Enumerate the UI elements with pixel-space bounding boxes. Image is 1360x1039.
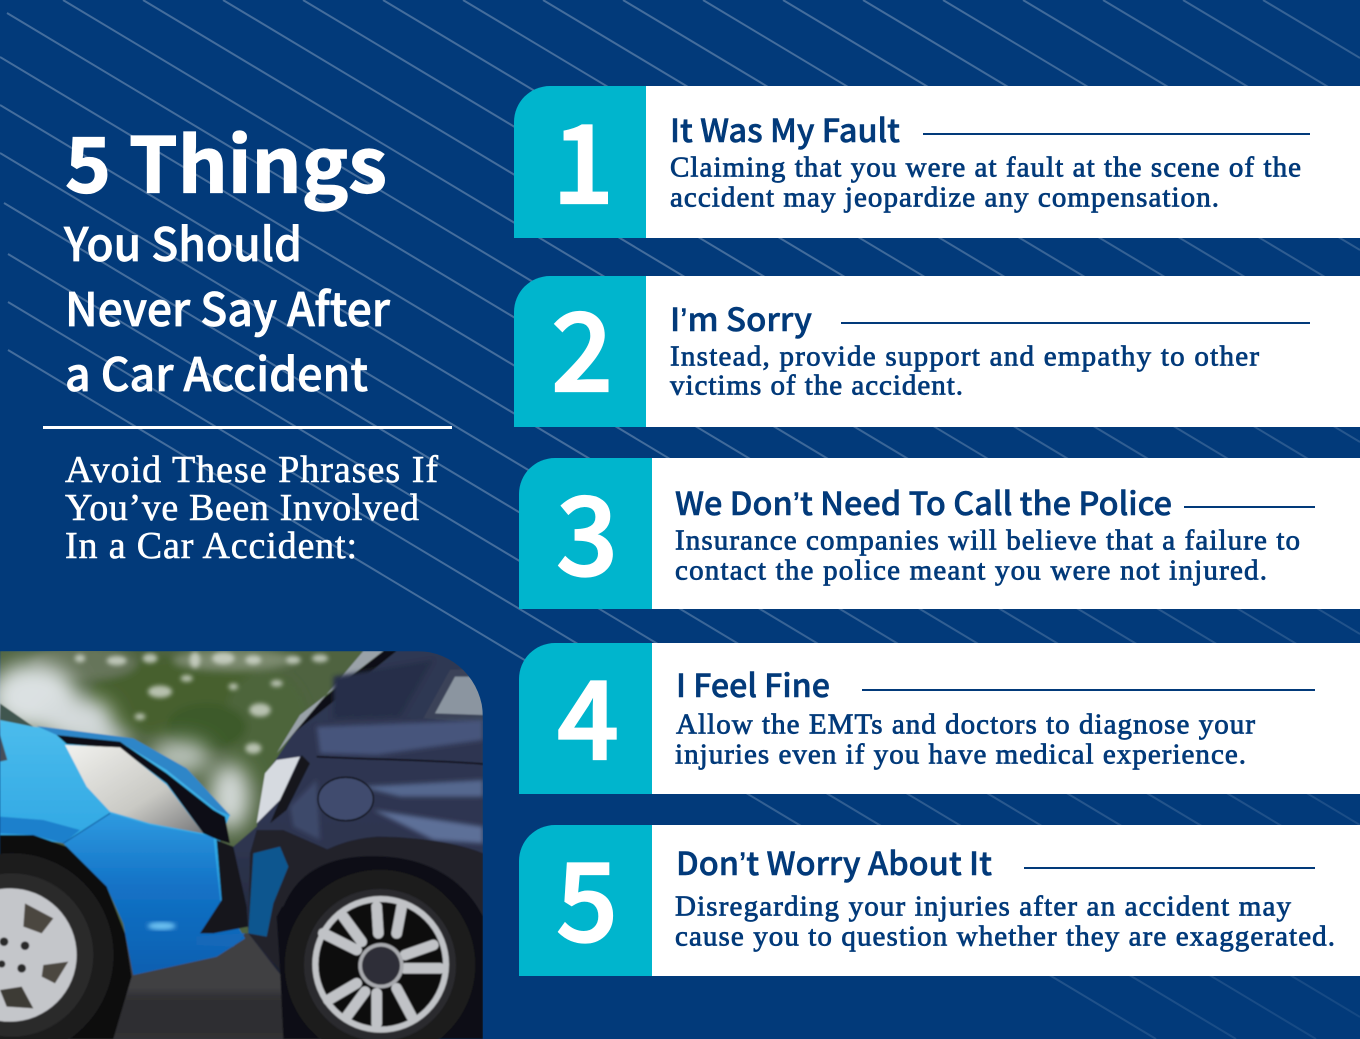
heading 4: I Feel Fine (676, 661, 830, 707)
heading 3: We Don’t Need To Call the Police (675, 479, 1172, 525)
body 2: Instead, provide support and empathy to other (670, 340, 1259, 372)
item 2: 2 (551, 267, 613, 423)
item 3: 3 (556, 451, 618, 607)
body 1: accident may jeopardize any compensation. (670, 181, 1219, 213)
rim (315, 899, 446, 1030)
bumper damage (200, 840, 248, 933)
body 3: Insurance companies will believe that a failure to (675, 524, 1300, 556)
main heading: 5 Things (65, 104, 387, 214)
rim (0, 888, 77, 1022)
heading 5: Don’t Worry About It (676, 839, 992, 885)
fuel door (318, 777, 373, 821)
smoke (0, 663, 250, 830)
number tab 2 (514, 276, 646, 427)
intro text: Avoid These Phrases If (65, 449, 438, 491)
tyre (285, 870, 475, 1039)
photo: two cars in a head-on collision (0, 647, 483, 1039)
wheel arch and tyre (0, 835, 132, 1039)
headlight (65, 745, 203, 833)
body 2: victims of the accident. (670, 369, 963, 401)
subheading line 3: a Car Accident (65, 339, 368, 405)
road (68, 932, 319, 1039)
heading 1: It Was My Fault (670, 106, 900, 152)
item 3 (519, 451, 1360, 609)
number tab 3 (519, 458, 652, 609)
trees (0, 651, 392, 934)
body 5: Disregarding your injuries after an accident may (675, 890, 1292, 922)
body 1: Claiming that you were at fault at the scene of the (670, 151, 1301, 183)
body 3: contact the police meant you were not injured. (675, 554, 1267, 586)
intro text (65, 449, 438, 567)
number tab 5 (519, 825, 652, 976)
black car (233, 651, 483, 1039)
item 5: 5 (556, 817, 618, 973)
intro text: In a Car Accident: (65, 525, 357, 567)
body 4: Allow the EMTs and doctors to diagnose your (676, 708, 1255, 740)
subheading line 2: Never Say After (65, 274, 390, 340)
crumpled hood (37, 726, 231, 816)
item 1 (514, 79, 1360, 238)
body 4: injuries even if you have medical experience. (675, 738, 1246, 770)
front bumper (248, 830, 327, 958)
window (423, 668, 483, 723)
item 5 (519, 817, 1360, 976)
number tab 1 (514, 86, 646, 238)
reflections (290, 660, 483, 843)
blue car (0, 703, 248, 1039)
item 1: 1 (552, 79, 614, 235)
item 4: 4 (557, 635, 619, 791)
heading 2: I’m Sorry (670, 295, 812, 341)
item 4 (519, 635, 1360, 794)
subheading line 1: You Should (63, 209, 302, 275)
number tab 4 (519, 643, 652, 794)
intro text: You’ve Been Involved (65, 487, 419, 529)
body 5: cause you to question whether they are exaggerated. (675, 920, 1335, 952)
wheel arch (277, 850, 483, 1039)
title block (63, 104, 390, 405)
item 2 (514, 267, 1360, 427)
